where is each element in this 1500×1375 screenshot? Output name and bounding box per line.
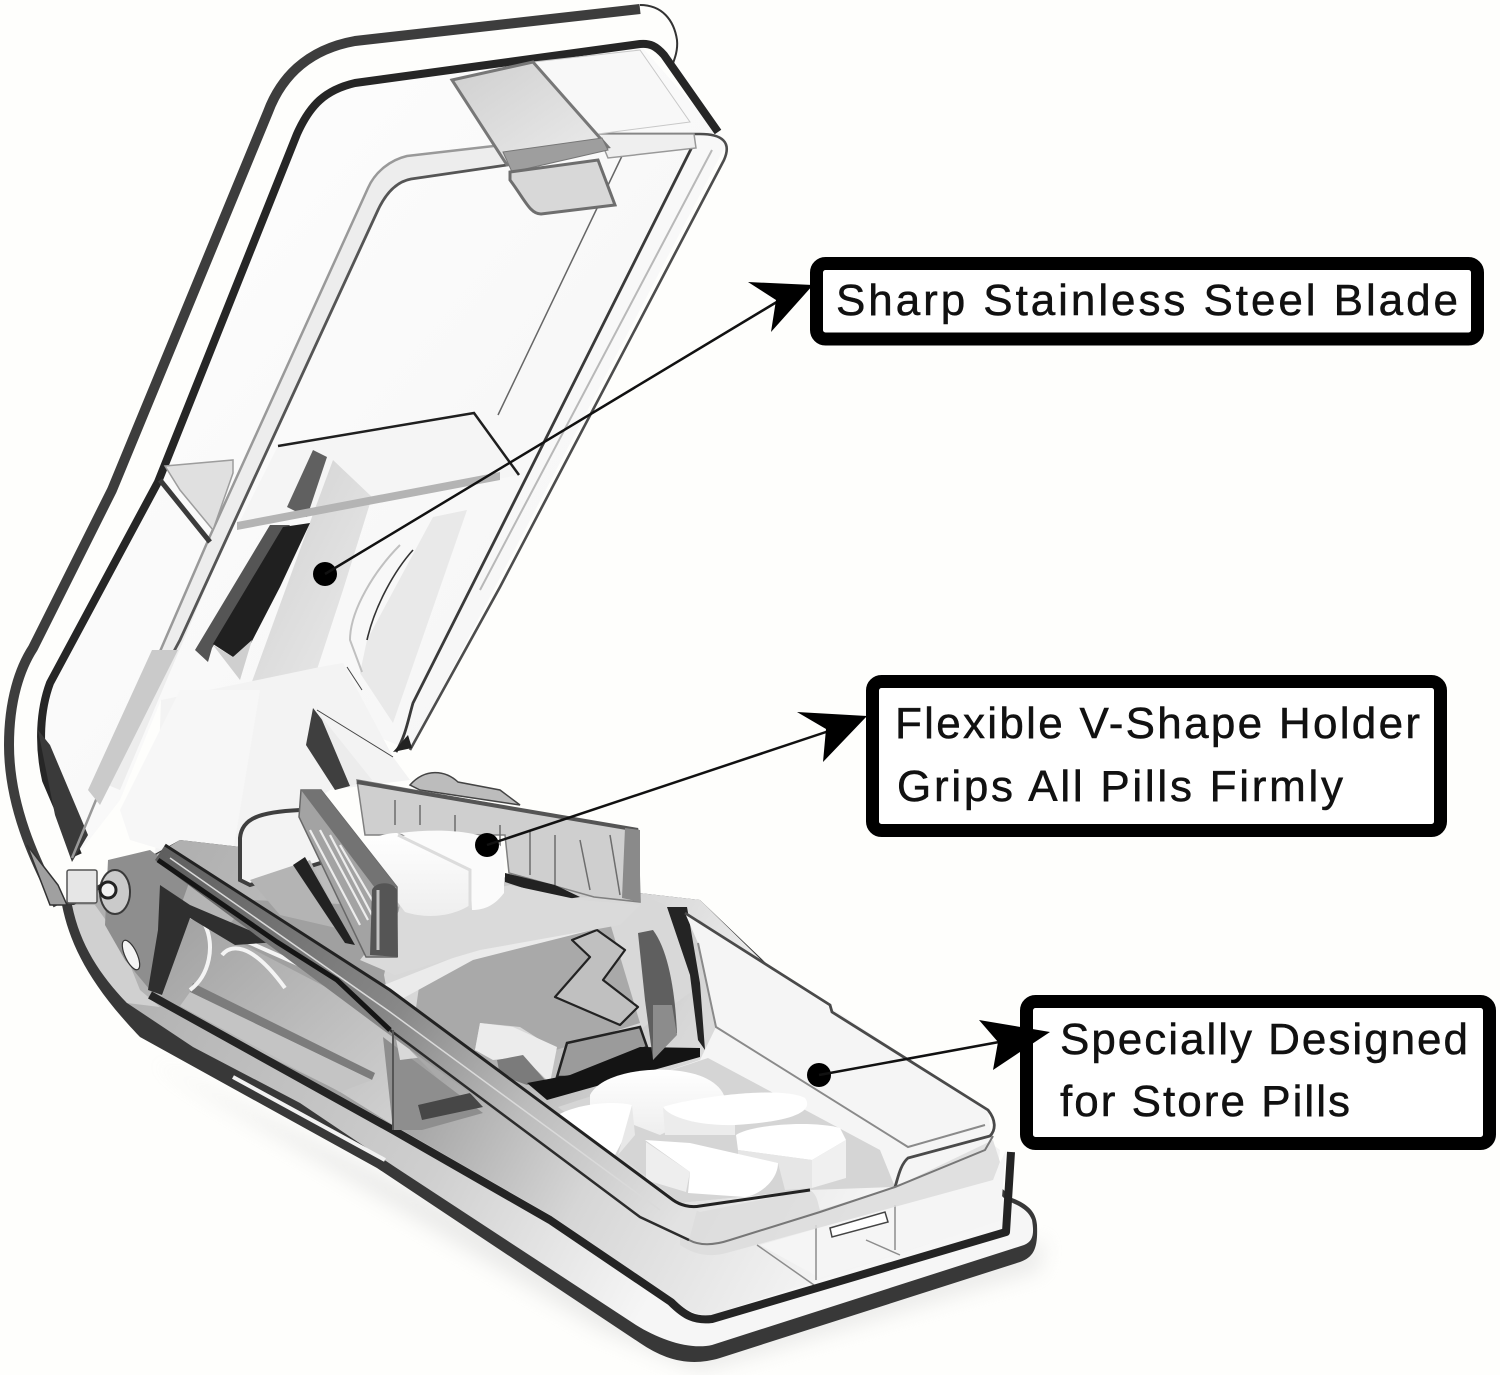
right post <box>638 930 677 1060</box>
label box <box>872 682 1440 830</box>
inner dark band <box>150 995 1011 1319</box>
front arm top strip <box>301 790 397 888</box>
diagonal rim top line <box>165 845 810 1207</box>
hinge white oval <box>119 938 143 972</box>
front arm end post <box>370 883 398 957</box>
hinge pin disc <box>100 870 130 914</box>
blade lower translucent gray <box>250 673 313 747</box>
blade dark face <box>213 523 310 657</box>
lid rim inner line <box>98 165 507 793</box>
lid rim outer line <box>72 134 598 858</box>
lid right middle faint line <box>480 150 712 590</box>
left compartment shelf <box>190 983 375 1080</box>
tray well floor <box>558 1058 895 1203</box>
lower lid dark wedge <box>38 730 88 862</box>
middle ledge back edge <box>278 413 519 475</box>
tray front clear panel <box>760 1150 1006 1278</box>
right compartment glass <box>383 1037 483 1130</box>
tray front lines <box>757 1205 900 1285</box>
well inner gray <box>250 860 345 930</box>
lid lower left gray strip <box>88 650 178 805</box>
arrowhead <box>748 282 813 332</box>
holder floor <box>384 895 700 1060</box>
pill E side left <box>738 1150 812 1190</box>
leader line <box>325 294 790 574</box>
leader dot <box>475 833 499 857</box>
right post highlight <box>653 1005 677 1060</box>
dark foot strip <box>505 873 580 900</box>
diagonal rim second line <box>170 858 660 1210</box>
lid outer dark band <box>9 9 640 905</box>
arm light gray area <box>72 905 160 1007</box>
left compartment shelf shade <box>180 992 372 1092</box>
tray lid front rim line <box>689 1136 993 1244</box>
lid corner reflection <box>533 50 690 134</box>
base side slot <box>233 1077 385 1160</box>
lid curved outer moulding <box>350 545 400 672</box>
leader line <box>819 1040 1010 1075</box>
wedge dark edge <box>317 667 393 757</box>
pill A <box>590 1070 725 1135</box>
lid back wall line <box>498 156 622 415</box>
blade tip reflection <box>213 640 252 680</box>
latch hinge strip <box>503 138 608 172</box>
pill E side shade <box>812 1140 846 1188</box>
ledge front strip <box>237 472 500 530</box>
diagonal rim lower line <box>390 1030 689 1240</box>
lid curved inner moulding <box>367 550 413 640</box>
lower lid left wedge <box>120 690 260 870</box>
pill B top <box>663 1093 807 1125</box>
back arm top edge <box>357 782 638 830</box>
left dark wedge <box>148 885 277 995</box>
hinge tab <box>27 845 67 905</box>
leader dot <box>807 1063 831 1087</box>
tray lid front rim <box>680 1140 1000 1255</box>
back arm ribs <box>395 800 620 895</box>
base <box>27 840 1037 1362</box>
open lid <box>9 5 727 905</box>
glass dark foot <box>418 1093 483 1120</box>
left ledge dark edge <box>160 480 210 542</box>
base plate <box>74 840 1033 1346</box>
V-shape holder <box>240 773 640 975</box>
floor shadow <box>150 1060 1045 1372</box>
middle ledge <box>237 413 519 527</box>
arrowhead <box>797 712 867 762</box>
left ledge <box>165 460 233 530</box>
dark column <box>667 907 705 1050</box>
front arm ribs <box>310 830 378 925</box>
pill cutter product illustration <box>9 5 1045 1372</box>
pill C <box>558 1103 632 1155</box>
diagonal rim band <box>155 845 697 1240</box>
lower lid white ramp <box>155 663 410 890</box>
blade holder upper dark piece <box>287 450 327 517</box>
central panel light strip <box>384 923 610 1000</box>
lid right edge inner line <box>396 143 694 752</box>
label text: Sharp Stainless Steel Blade <box>836 276 1458 325</box>
inner upright <box>306 708 353 790</box>
holder floor front <box>360 885 640 975</box>
callout: sharp stainless steel blade <box>313 264 1478 586</box>
center foot shape <box>557 1027 647 1077</box>
left compartment <box>160 915 393 1125</box>
compartment divider <box>392 1030 394 1130</box>
tray lid inner line <box>698 943 985 1147</box>
tray lid clear surface <box>560 913 993 1203</box>
front arm <box>299 790 397 957</box>
latch lower <box>510 160 615 214</box>
back well arch <box>240 810 330 885</box>
pill B side <box>663 1107 735 1135</box>
pill C side <box>618 1105 635 1155</box>
lid right edge outer line <box>410 134 727 750</box>
dark clip <box>293 857 355 945</box>
pill D side shade <box>646 1142 690 1192</box>
pill in holder <box>366 831 504 916</box>
arrowhead <box>979 1020 1050 1070</box>
hinge gray arm <box>105 850 190 990</box>
hinge pin center <box>100 882 116 898</box>
leader dot <box>313 562 337 586</box>
tray slot <box>830 1212 888 1237</box>
tray bottom face <box>165 900 1000 1315</box>
pill score line <box>398 835 470 908</box>
back arm <box>357 780 640 902</box>
blade steel <box>250 460 372 700</box>
lid rim translucent band <box>103 134 598 790</box>
label text line two: Grips All Pills Firmly <box>897 762 1343 811</box>
inner upright face <box>320 715 372 786</box>
base outer dark band <box>62 840 1037 1362</box>
center dark box <box>497 1055 545 1085</box>
central lower white patch <box>475 1023 557 1083</box>
blade lower dark spot <box>270 710 293 733</box>
lid upper rim flat strip <box>598 134 696 158</box>
dark strip under center <box>527 1047 700 1100</box>
zigzag insert <box>555 930 638 1025</box>
lid corner thin edge <box>640 5 677 66</box>
lid interior surface <box>41 45 727 857</box>
callout: flexible v-shape holder <box>475 682 1440 857</box>
label text line one: Flexible V-Shape Holder <box>895 699 1420 748</box>
blade holder outer strip <box>195 525 290 662</box>
pill E <box>736 1124 846 1160</box>
label box <box>1026 1002 1490 1144</box>
label text line two: for Store Pills <box>1060 1077 1350 1126</box>
holder bump <box>410 773 520 805</box>
pills in tray <box>558 1070 846 1197</box>
latch upper <box>452 62 608 165</box>
label box <box>816 264 1478 339</box>
central gray panel <box>410 923 640 1080</box>
lid reflection panel <box>360 510 467 723</box>
pill D <box>645 1140 778 1197</box>
callout: store pills <box>807 1002 1490 1144</box>
pill half right <box>400 831 504 910</box>
back arm end post <box>622 828 640 902</box>
post highlight <box>376 890 380 950</box>
leader line <box>487 724 850 845</box>
tray lid back double edge <box>685 913 994 1187</box>
label text line one: Specially Designed <box>1060 1015 1468 1064</box>
pill half left <box>366 833 470 916</box>
lid inner dark band <box>41 44 718 855</box>
diagonal rim thick lower stripe <box>158 860 390 1030</box>
hinge pin housing <box>67 870 97 903</box>
lid hinge corner tip <box>393 735 412 752</box>
left compartment highlights <box>187 915 300 990</box>
